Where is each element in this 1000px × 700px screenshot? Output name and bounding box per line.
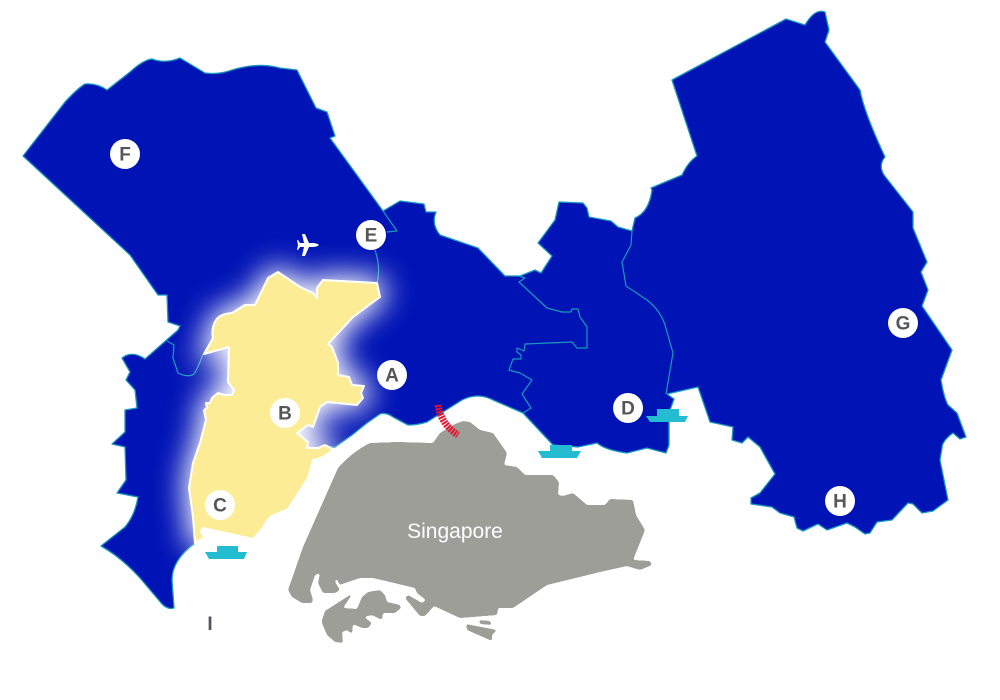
icon: airplane bbox=[297, 234, 319, 256]
map: Singapore main island bbox=[288, 421, 652, 618]
icon: ferry south of A bbox=[538, 445, 581, 458]
marker D bbox=[613, 393, 643, 423]
icon: ferry at D bbox=[646, 409, 688, 422]
marker B: B bbox=[278, 404, 292, 424]
marker A: A bbox=[385, 366, 399, 386]
marker G bbox=[888, 308, 918, 338]
label I: I bbox=[207, 614, 213, 635]
marker C bbox=[205, 490, 235, 520]
marker A bbox=[377, 360, 407, 390]
marker D: D bbox=[621, 398, 635, 420]
map: Singapore southern islands bbox=[322, 590, 497, 643]
marker H bbox=[825, 486, 855, 516]
marker F: F bbox=[119, 144, 131, 166]
marker G: G bbox=[896, 314, 910, 334]
icon: ferry at C bbox=[205, 546, 247, 559]
marker E bbox=[356, 220, 386, 250]
marker F bbox=[110, 139, 140, 169]
marker C: C bbox=[213, 496, 227, 516]
marker E: E bbox=[365, 226, 377, 246]
marker B bbox=[270, 398, 300, 428]
causeway bridge (red) bbox=[438, 405, 458, 435]
label: Singapore: Singapore bbox=[407, 520, 503, 543]
glow around highlighted region bbox=[189, 272, 380, 543]
region B/C: highlighted area (yellow) bbox=[189, 272, 380, 543]
marker H: H bbox=[833, 492, 847, 512]
